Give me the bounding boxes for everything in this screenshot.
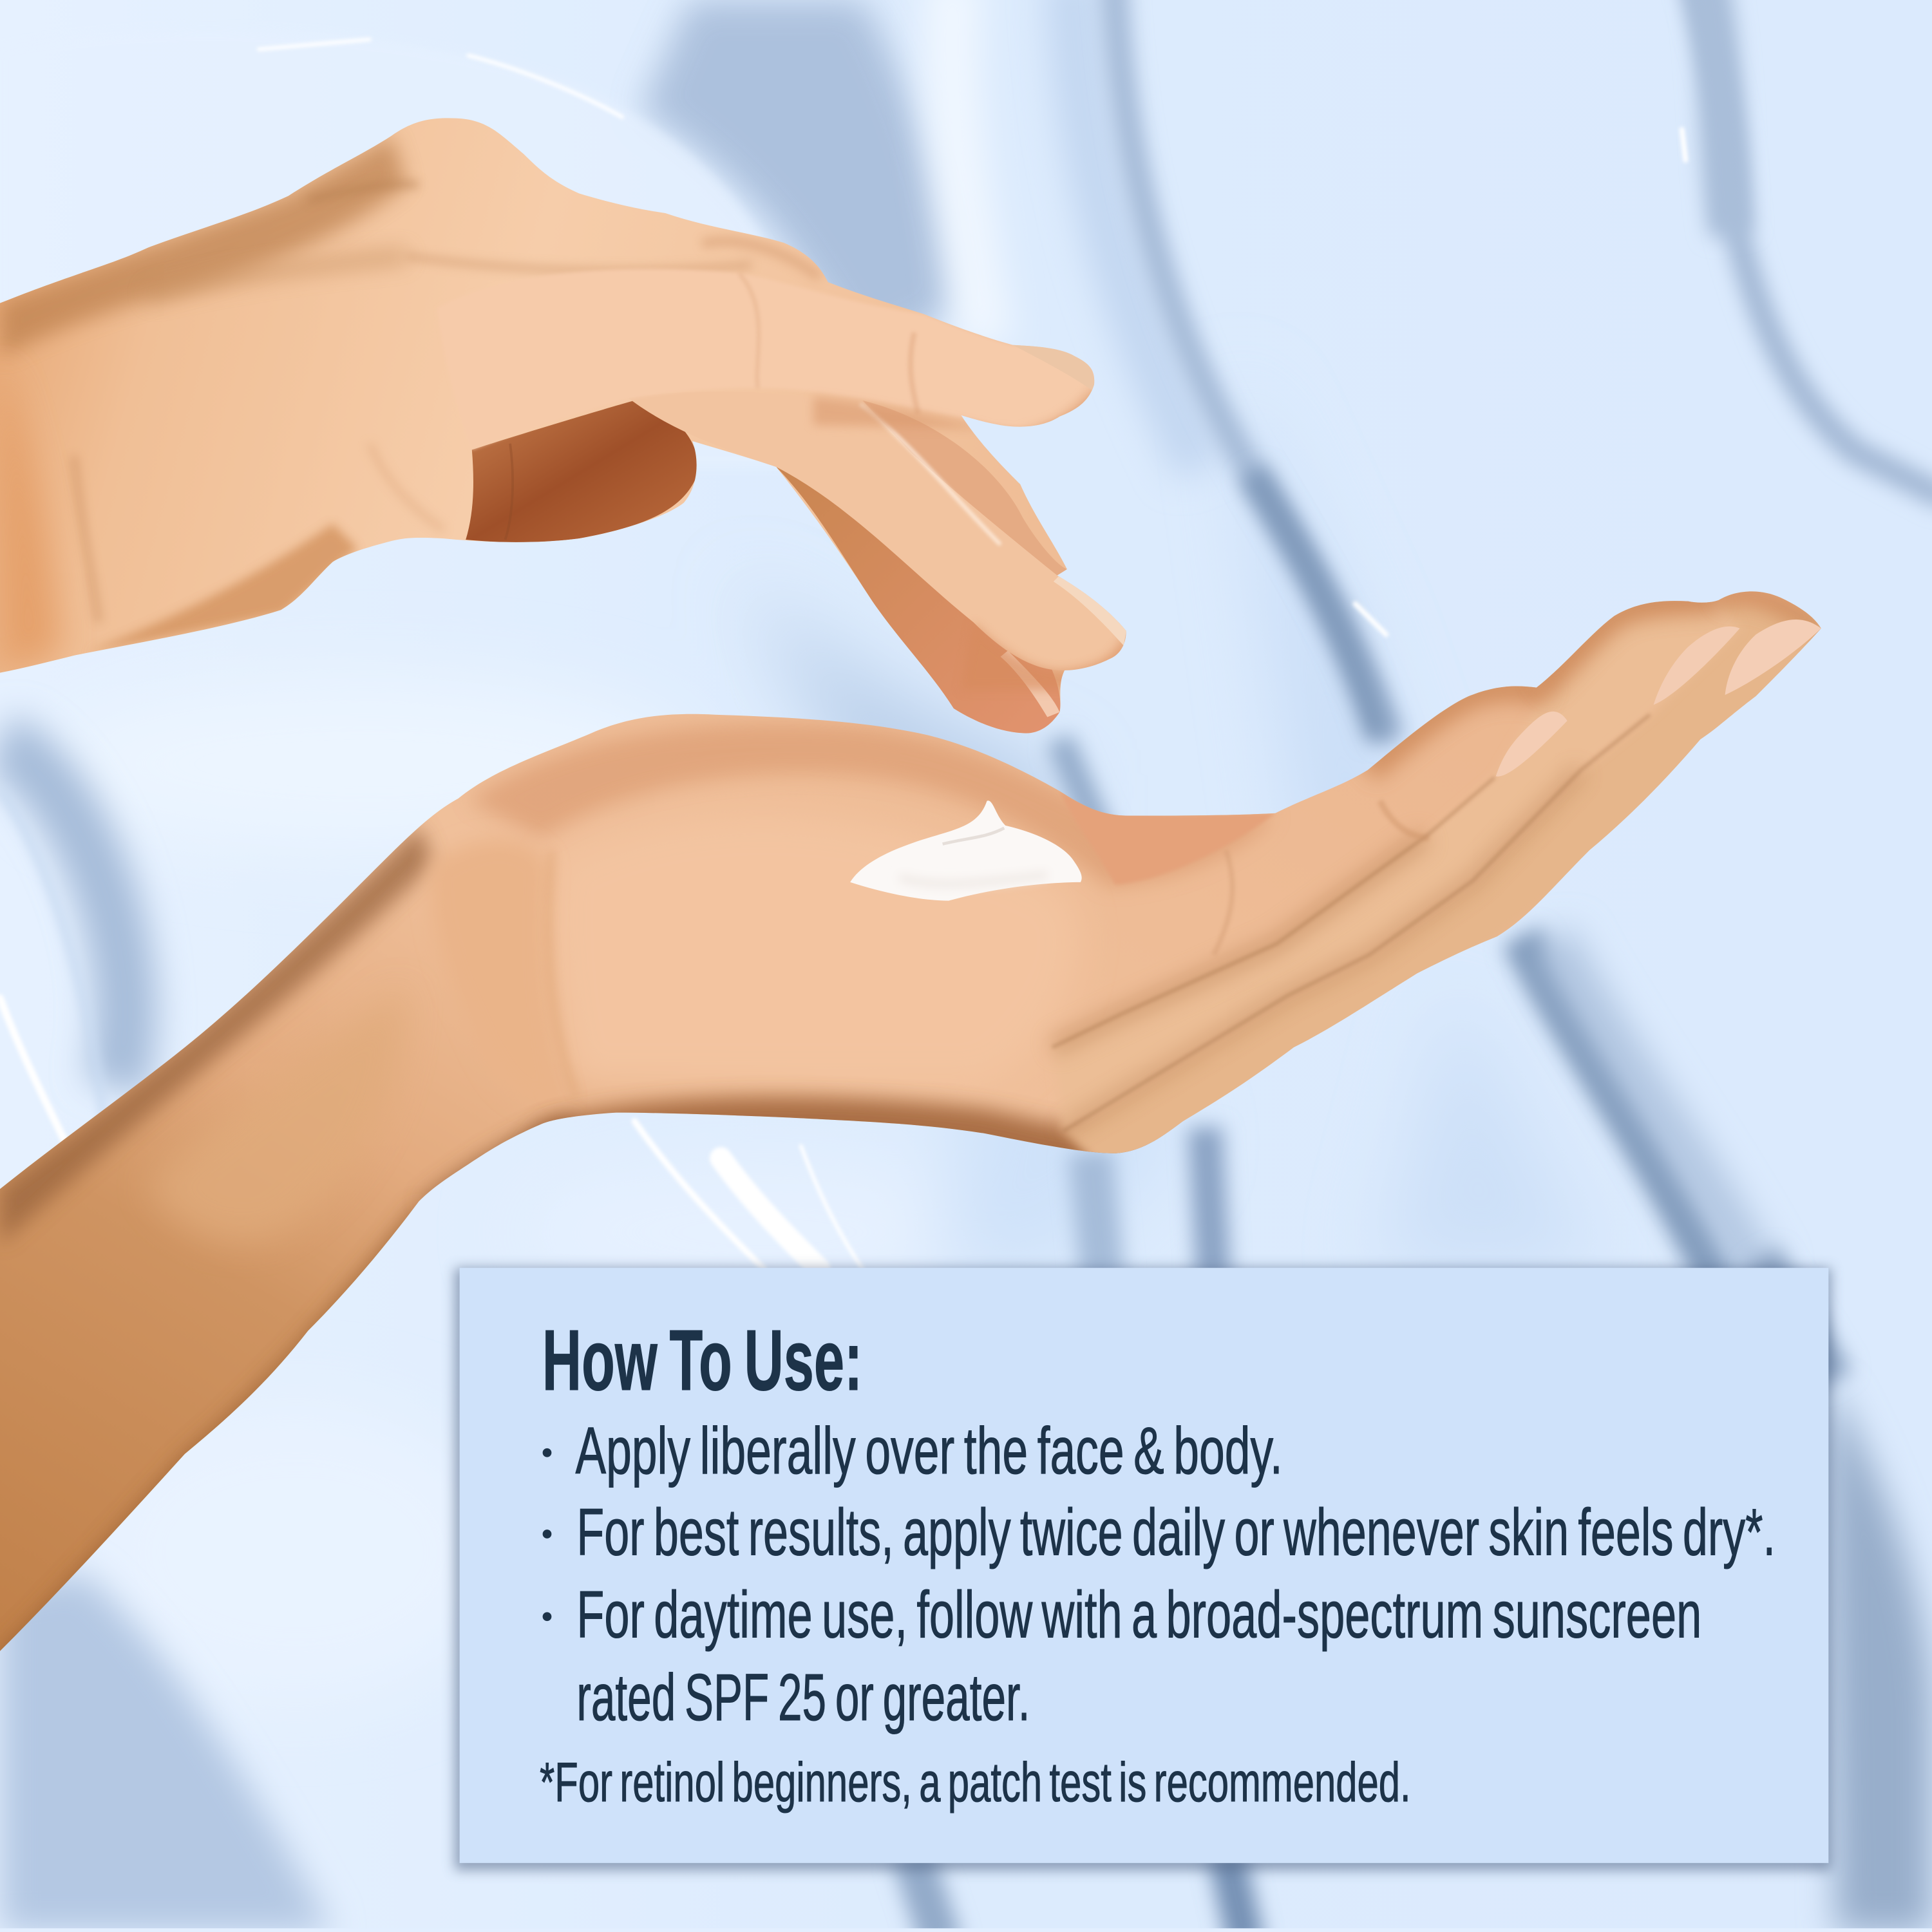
upper hand: back finger <box>862 401 1067 575</box>
upper hand: nail index <box>1013 345 1094 392</box>
lower hand <box>0 591 1848 1688</box>
lower hand: index finger shading <box>1052 594 1821 1131</box>
upper hand: back of hand shading <box>0 135 752 673</box>
bullet 1: Apply liberally over the face & body. <box>575 1413 1283 1488</box>
upper hand: index finger <box>437 269 1094 450</box>
cream dollop <box>850 800 1082 901</box>
lower hand: palm light <box>552 814 1079 1084</box>
lower hand: palm top crease area <box>468 724 1275 887</box>
upper hand: middle finger <box>629 392 1126 670</box>
panel: how to use <box>460 1268 1828 1863</box>
panel shadow <box>455 1268 1831 1870</box>
lower hand: palm bottom shadow <box>493 1097 1183 1183</box>
upper hand: lowest finger <box>776 467 1060 734</box>
footnote: *For retinol beginners, a patch test is recommended. <box>540 1752 1411 1814</box>
bullet 3 <box>543 1577 1701 1734</box>
lower hand: wrist and forearm shading <box>0 826 579 1688</box>
upper hand: nail lowest finger <box>1001 650 1059 717</box>
heading: How To Use: <box>542 1312 862 1408</box>
upper hand: tucked thumb <box>466 401 698 542</box>
lower hand: nails <box>1496 620 1821 777</box>
bullet 3: rated SPF 25 or greater. <box>576 1660 1030 1734</box>
lower hand: middle finger <box>1052 600 1740 1131</box>
lower hand: ring finger <box>1063 600 1848 1183</box>
upper hand <box>0 118 1133 734</box>
upper hand: nail middle finger <box>1054 575 1126 646</box>
bullet 1 <box>543 1413 1283 1488</box>
